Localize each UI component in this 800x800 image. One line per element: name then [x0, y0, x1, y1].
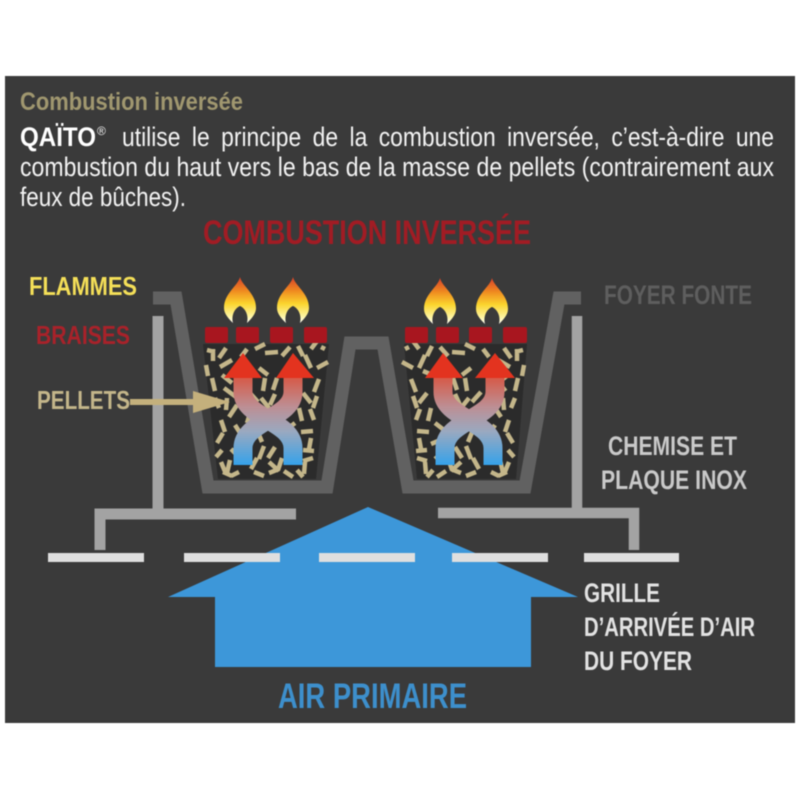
flame 1	[224, 277, 256, 323]
flame 2	[277, 277, 309, 323]
registered mark: ®	[97, 124, 106, 138]
flame 4	[476, 278, 508, 324]
dark panel background	[5, 76, 795, 723]
label: flammes: FLAMMES	[29, 271, 137, 301]
arrow head right	[475, 353, 515, 378]
heading: combustion inversée: Combustion inversée	[20, 88, 243, 116]
brand name QAÏTO: QAÏTO	[20, 122, 96, 152]
label: chemise et plaque inox	[601, 431, 747, 495]
stainless jacket left	[100, 316, 296, 550]
flow arrow C	[445, 372, 495, 465]
arrow head right	[276, 353, 314, 378]
label: grille d'arrivée d'air du foyer	[584, 578, 755, 676]
label: braises: BRAISES	[36, 320, 130, 350]
pot interior left	[203, 344, 329, 479]
pot interior right	[404, 344, 527, 479]
label line 1: GRILLE	[584, 578, 660, 608]
stainless jacket right	[438, 316, 634, 550]
pellets right	[402, 341, 524, 477]
reversed air flow arrows left	[224, 353, 314, 465]
arrow head left	[425, 353, 463, 378]
label line 1: CHEMISE ET	[608, 431, 737, 461]
flow arrow D	[443, 372, 493, 465]
label: air primaire: AIR PRIMAIRE	[278, 677, 467, 716]
reversed air flow arrows right	[425, 353, 515, 465]
arrow: pellets	[130, 391, 230, 413]
flow arrow B	[243, 372, 293, 465]
intro text block	[20, 122, 774, 212]
embers left	[205, 327, 327, 343]
label line 2: PLAQUE INOX	[601, 465, 747, 495]
arrow head left	[224, 353, 262, 378]
flame 3	[424, 278, 456, 324]
cast iron hearth	[153, 298, 581, 487]
pellets left	[206, 341, 328, 477]
diagram title: COMBUSTION INVERSÉE	[203, 214, 531, 252]
primary air arrow	[168, 507, 578, 667]
embers right	[405, 327, 527, 343]
label: foyer fonte: FOYER FONTE	[604, 280, 752, 310]
intro line 3: feux de bûches).	[20, 182, 186, 212]
flow arrow A	[243, 372, 293, 465]
air grate	[48, 553, 679, 562]
label: pellets: PELLETS	[37, 385, 130, 415]
label line 3: DU FOYER	[584, 646, 692, 676]
